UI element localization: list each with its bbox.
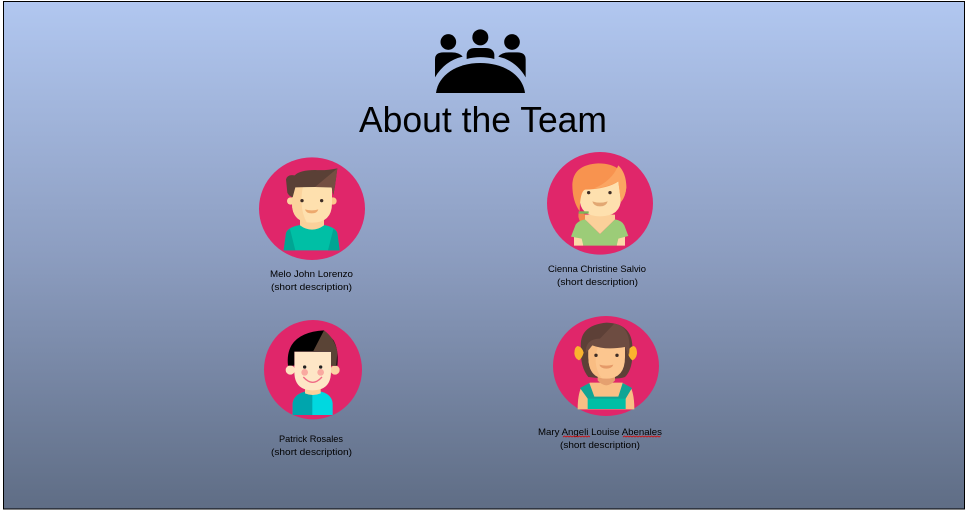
- name: Mary Angeli Louise Abenales: Mary Angeli Louise Abenales: [538, 427, 662, 438]
- icon: team around a table: [435, 29, 526, 93]
- description: Mary Angeli Louise Abenales: (short description): [560, 440, 640, 451]
- description: Melo John Lorenzo: (short description): [271, 282, 352, 293]
- avatar: Cienna Christine Salvio: [547, 152, 653, 255]
- title: About the Team: [359, 99, 607, 140]
- avatar: Mary Angeli Louise Abenales: [553, 316, 659, 416]
- description: Cienna Christine Salvio: (short description): [557, 277, 638, 288]
- avatar: Melo John Lorenzo: [259, 157, 365, 260]
- avatar: Patrick Rosales: [264, 320, 362, 419]
- name: Melo John Lorenzo: Melo John Lorenzo: [270, 269, 353, 280]
- description: Patrick Rosales: (short description): [271, 447, 352, 458]
- name: Cienna Christine Salvio: Cienna Christine Salvio: [548, 264, 646, 275]
- name: Patrick Rosales: Patrick Rosales: [279, 434, 343, 445]
